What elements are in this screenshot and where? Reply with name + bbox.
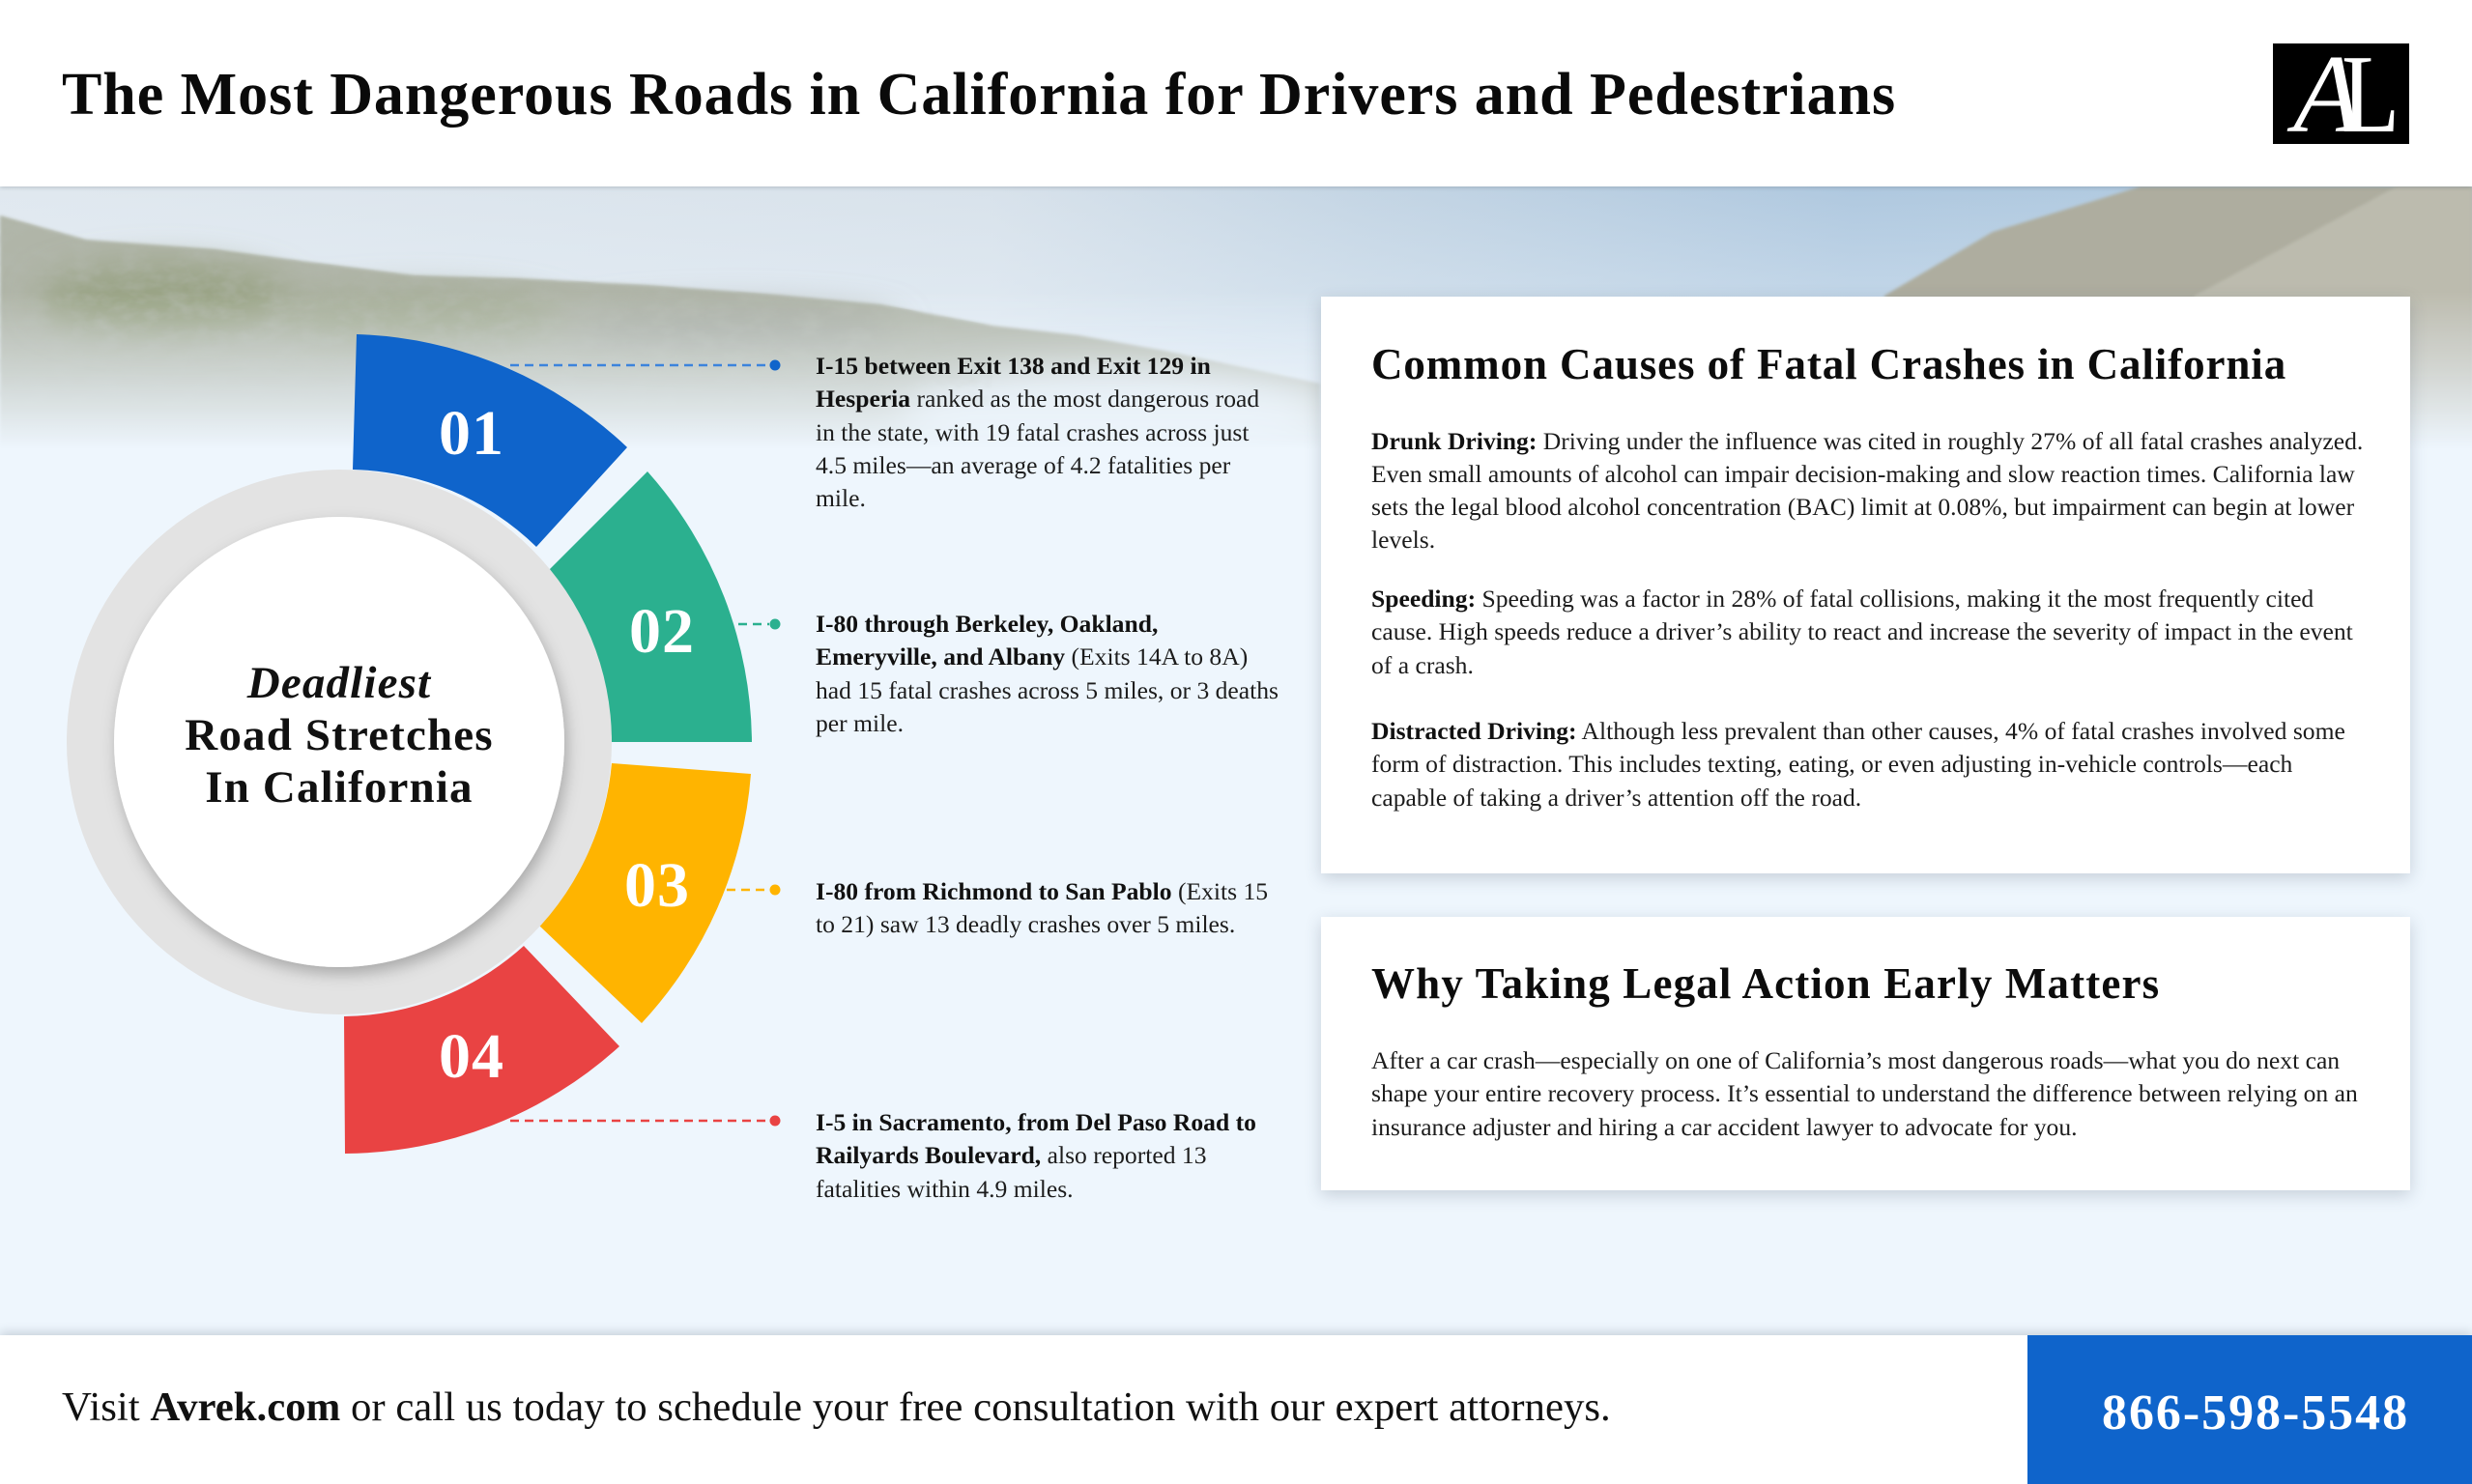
road text 01: mile.	[816, 484, 866, 512]
distracted driving text: capable of taking a driver’s attention off the road.	[1371, 784, 1861, 812]
grey ring	[67, 470, 612, 1014]
logo	[2273, 43, 2409, 144]
centre label: In California	[205, 762, 474, 813]
drunk driving text	[1371, 427, 2363, 554]
speeding text: of a crash.	[1371, 651, 1474, 679]
road text 04: I-5 in Sacramento, from Del Paso Road to	[816, 1108, 1256, 1136]
title: The Most Dangerous Roads in California for Drivers and Pedestrians	[62, 62, 1896, 128]
leader line 03	[727, 885, 781, 895]
road text 02: per mile.	[816, 709, 904, 737]
road text 03: I-80 from Richmond to San Pablo (Exits 15	[816, 877, 1268, 905]
distracted driving text: Distracted Driving: Although less prevalent than other causes, 4% of fatal crashes involved some	[1371, 717, 2345, 745]
road text 04: fatalities within 4.9 miles.	[816, 1175, 1074, 1203]
panel: common causes	[1321, 297, 2410, 873]
road text 04	[816, 1108, 1256, 1203]
drunk driving text: Drunk Driving: Driving under the influence was cited in roughly 27% of all fatal crashes analyzed.	[1371, 427, 2363, 455]
header bar	[0, 0, 2472, 186]
footer bar	[0, 1335, 2472, 1484]
segment 02: 02	[629, 596, 695, 667]
background coastal photo	[0, 186, 2472, 435]
legal action text	[1371, 1046, 2358, 1141]
segment 03: 03	[624, 850, 690, 921]
road text 02	[816, 610, 1279, 737]
speeding text	[1371, 585, 2353, 679]
distracted driving text	[1371, 717, 2345, 812]
leader line 02	[738, 618, 781, 630]
centre label: Deadliest	[246, 658, 432, 708]
right hill	[1883, 186, 2472, 390]
radial diagram: deadliest road stretches	[67, 334, 781, 1154]
speeding text: Speeding: Speeding was a factor in 28% of fatal collisions, making it the most frequently cited	[1371, 585, 2314, 613]
phone number: 866-598-5548	[2102, 1385, 2409, 1441]
road text 01	[816, 352, 1259, 512]
left hill	[0, 214, 1320, 434]
heading: common causes: Common Causes of Fatal Crashes in California	[1371, 340, 2286, 388]
call to action: Visit Avrek.com or call us today to schedule your free consultation with our expert attorneys.	[62, 1384, 1611, 1430]
centre label: Road Stretches	[185, 710, 494, 760]
centre label	[185, 658, 494, 813]
segment 01	[353, 334, 627, 547]
legal action text: After a car crash—especially on one of California’s most dangerous roads—what you do next can	[1371, 1046, 2340, 1074]
road text 02: had 15 fatal crashes across 5 miles, or 3 deaths	[816, 676, 1279, 704]
road text 01: 4.5 miles—an average of 4.2 fatalities per	[816, 451, 1230, 479]
road text 01: Hesperia ranked as the most dangerous road	[816, 385, 1259, 413]
road text 01: in the state, with 19 fatal crashes across just	[816, 418, 1249, 446]
legal action text: shape your entire recovery process. It’s essential to understand the difference between relying on an	[1371, 1079, 2358, 1107]
road text 01: I-15 between Exit 138 and Exit 129 in	[816, 352, 1211, 380]
leader line 01	[510, 359, 781, 371]
heading: legal action: Why Taking Legal Action Early Matters	[1371, 959, 2160, 1008]
speeding text: cause. High speeds reduce a driver’s ability to react and increase the severity of impact in the event	[1371, 617, 2353, 645]
legal action text: insurance adjuster and hiring a car accident lawyer to advocate for you.	[1371, 1113, 2078, 1141]
segment 04	[344, 946, 619, 1154]
road text 03: to 21) saw 13 deadly crashes over 5 miles.	[816, 910, 1235, 938]
segment 04: 04	[439, 1021, 504, 1092]
white centre circle	[114, 517, 564, 967]
road text 02: Emeryville, and Albany (Exits 14A to 8A)	[816, 642, 1248, 671]
panel: legal action	[1321, 917, 2410, 1190]
road text 03	[816, 877, 1268, 938]
drunk driving text: levels.	[1371, 526, 1435, 554]
leader line 04	[510, 1115, 781, 1127]
segment 03	[539, 763, 751, 1023]
road text 02: I-80 through Berkeley, Oakland,	[816, 610, 1158, 638]
segment 01: 01	[439, 398, 504, 469]
distracted driving text: form of distraction. This includes texting, eating, or even adjusting in-vehicle controls—each	[1371, 750, 2292, 778]
road text 04: Railyards Boulevard, also reported 13	[816, 1141, 1207, 1169]
phone block	[2027, 1335, 2472, 1484]
drunk driving text: sets the legal blood alcohol concentration (BAC) limit at 0.08%, but impairment can begin at lower	[1371, 493, 2354, 521]
segment 02	[544, 471, 752, 742]
drunk driving text: Even small amounts of alcohol can impair decision-making and slow reaction times. California law	[1371, 460, 2355, 488]
